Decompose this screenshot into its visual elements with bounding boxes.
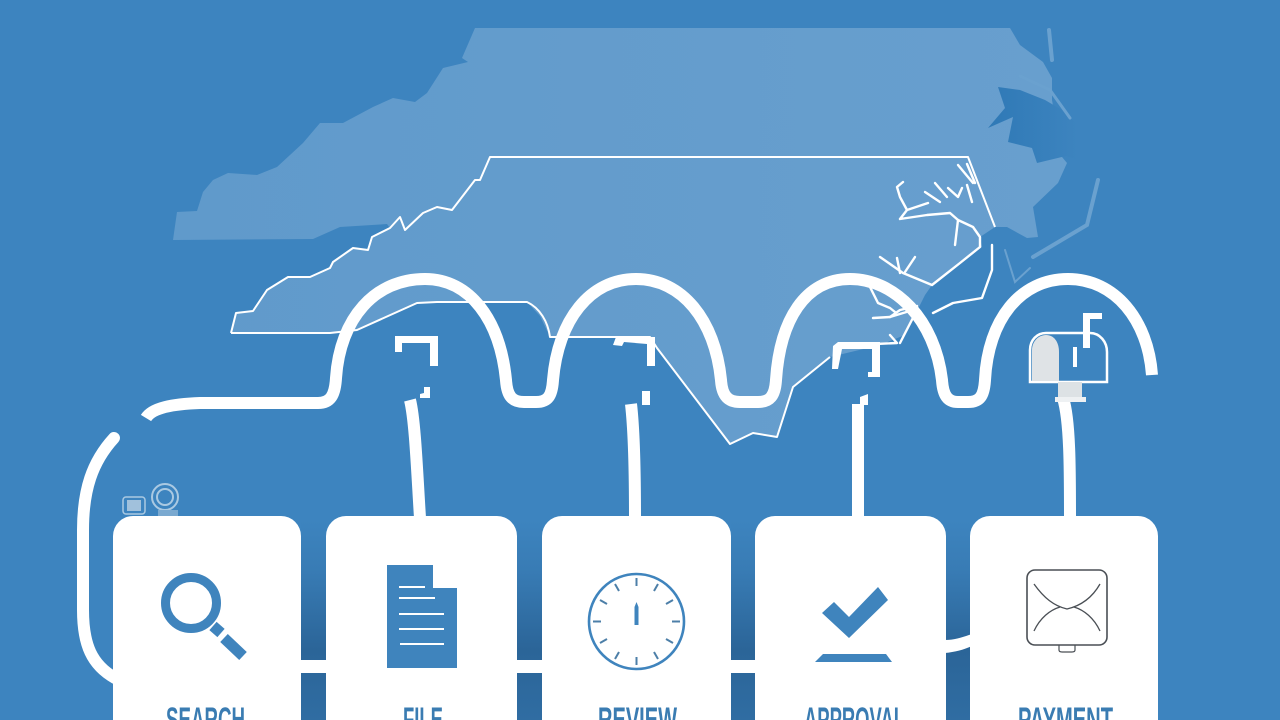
shading between cards	[301, 520, 970, 720]
marker 1	[395, 336, 438, 398]
icon: mailbox	[1030, 313, 1107, 402]
bracket markers along road	[395, 336, 880, 405]
card: search	[113, 516, 301, 720]
card: review	[542, 516, 731, 720]
icon: magnifying glass	[166, 578, 243, 656]
icon: small camera and lens	[123, 484, 178, 516]
road: main winding path	[146, 279, 1152, 418]
map: white state outline	[231, 157, 995, 444]
map: coastline detail	[855, 164, 992, 345]
connectors from road to cards	[410, 398, 1070, 518]
card: approval	[755, 516, 946, 720]
icon: envelope	[1027, 570, 1107, 652]
card: file	[326, 516, 517, 720]
map: dark coastal sound shape	[988, 87, 1078, 163]
icon: clock	[589, 574, 684, 669]
icon: document	[387, 565, 457, 668]
marker 3	[832, 342, 880, 405]
links between cards	[300, 634, 972, 673]
marker 2	[613, 337, 655, 405]
map: shadow silhouette of North Carolina	[173, 28, 1078, 444]
road: left curve into first card	[83, 438, 115, 678]
card: payment	[970, 516, 1158, 720]
icon: check mark over base	[815, 587, 892, 662]
map: faint barrier island strokes	[1005, 30, 1098, 282]
